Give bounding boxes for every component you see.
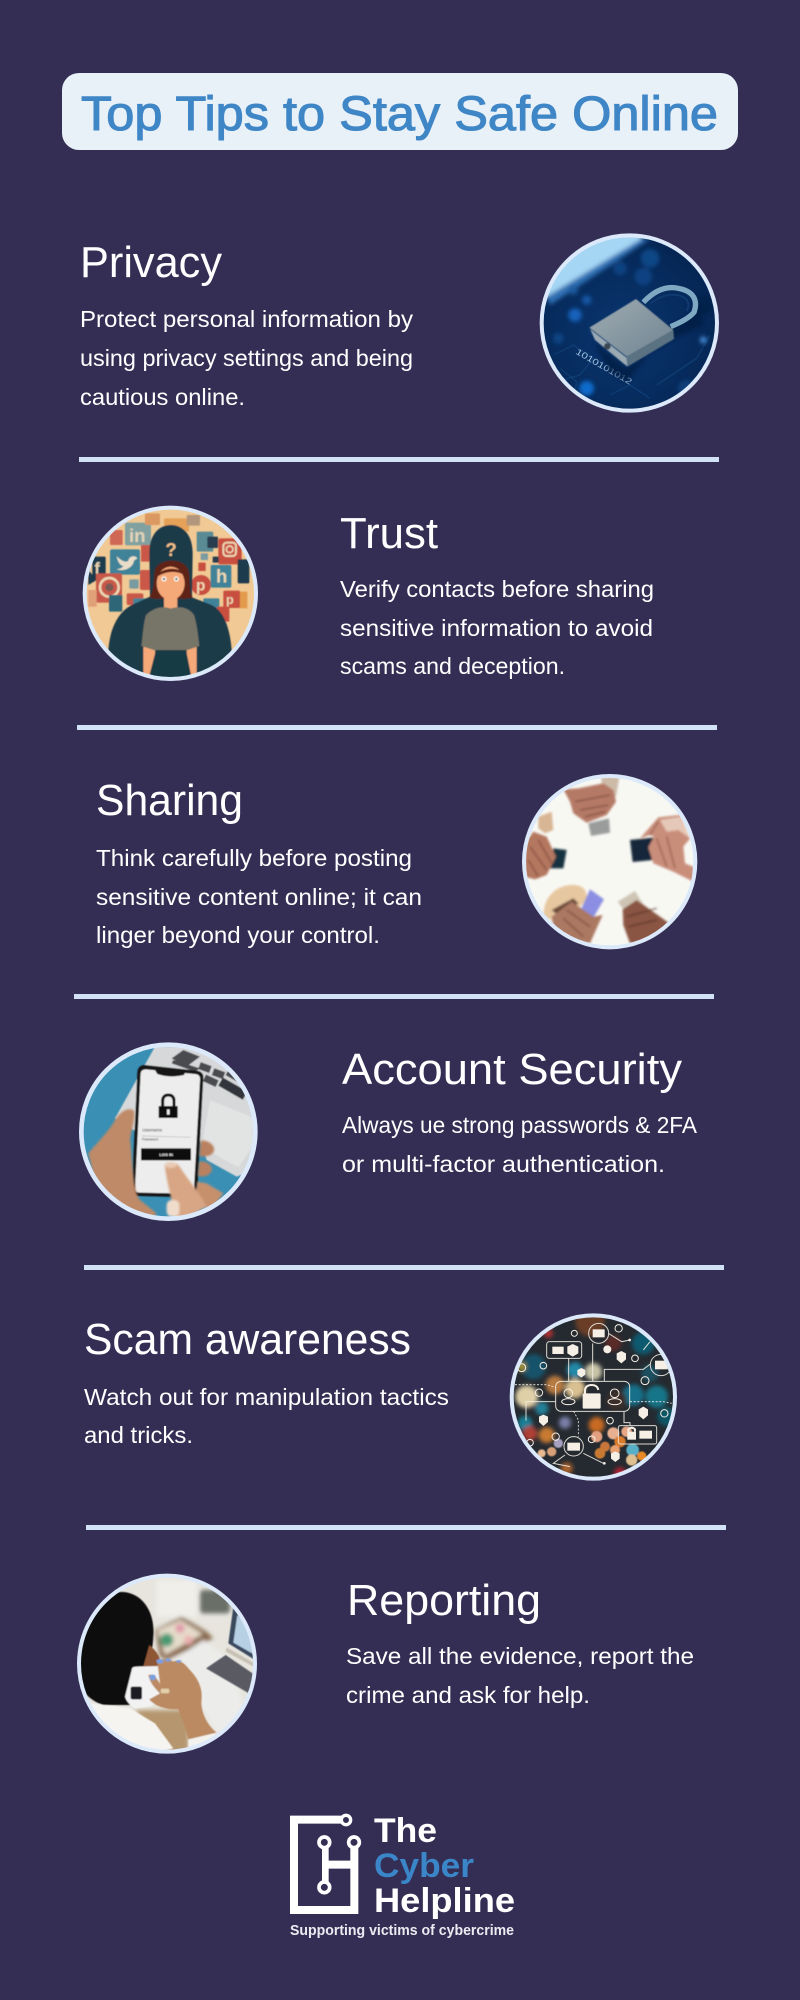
- text: trust description: scams and deception.: [340, 653, 565, 679]
- panel: privacy: [81, 233, 719, 413]
- heading: sharing: Sharing: [96, 776, 243, 825]
- divider: [86, 1525, 726, 1530]
- image: cyber threat network over bokeh lights: [510, 1313, 677, 1481]
- image: woman surrounded by social media icons: in: [129, 525, 146, 546]
- text: reporting description: Save all the evidence, report the: [346, 1643, 694, 1669]
- image: phone login screen with padlock: Password: [142, 1138, 158, 1142]
- text: tagline: Supporting victims of cybercrime: [290, 1922, 514, 1939]
- divider: [84, 1265, 724, 1270]
- text: sharing description: [96, 845, 422, 948]
- heading: scam awareness: Scam awareness: [84, 1315, 411, 1364]
- text: sharing description: sensitive content online; it can: [96, 884, 422, 910]
- panel: sharing: [96, 774, 698, 950]
- text: trust description: Verify contacts before sharing: [340, 576, 654, 602]
- image: woman surrounded by social media icons: ?: [165, 539, 177, 560]
- image: phone login screen with padlock: LOG IN: [159, 1152, 173, 1157]
- text: privacy description: [80, 306, 414, 410]
- text: scam awareness description: and tricks.: [84, 1422, 193, 1448]
- text: privacy description: using privacy settings and being: [80, 345, 413, 371]
- heading: trust: Trust: [340, 509, 438, 558]
- image: phone login screen with padlock: [79, 1042, 258, 1221]
- text: reporting description: [346, 1643, 694, 1708]
- text: scam awareness description: [84, 1384, 449, 1448]
- heading: reporting: Reporting: [347, 1576, 541, 1625]
- text: account security description: Always ue strong passwords & 2FA: [342, 1112, 698, 1138]
- icon: circuit H mark: [294, 1815, 359, 1910]
- panel: reporting: [77, 1574, 693, 1754]
- divider: [79, 457, 719, 462]
- image: padlock on circuit board: [540, 233, 719, 413]
- panel: scam awareness: [84, 1313, 677, 1481]
- text: wordmark: [374, 1812, 515, 1920]
- image: phone login screen with padlock: Username: [142, 1128, 163, 1133]
- image: woman surrounded by social media icons: f: [94, 559, 100, 578]
- image: woman surrounded by social media icons: [82, 506, 258, 681]
- divider: [74, 994, 714, 999]
- heading: account security: Account Security: [342, 1045, 682, 1094]
- text: sharing description: linger beyond your control.: [96, 922, 380, 948]
- image: woman surrounded by social media icons: h: [216, 566, 227, 587]
- image: woman surrounded by social media icons: p: [196, 578, 205, 595]
- panel: account security: [79, 1042, 697, 1221]
- logo: The Cyber Helpline: [290, 1812, 515, 1939]
- text: account security description: or multi-factor authentication.: [342, 1151, 665, 1177]
- image: woman surrounded by social media icons: p: [226, 593, 234, 607]
- title banner: Top Tips to Stay Safe Online: [81, 88, 718, 141]
- text: wordmark: The: [374, 1812, 437, 1850]
- divider: [77, 725, 717, 730]
- text: account security description: [342, 1112, 698, 1177]
- text: privacy description: cautious online.: [80, 384, 245, 410]
- text: trust description: sensitive information to avoid: [340, 615, 653, 641]
- heading: privacy: Privacy: [80, 238, 222, 287]
- text: sharing description: Think carefully before posting: [96, 845, 412, 871]
- text: wordmark: Cyber: [374, 1847, 474, 1885]
- text: reporting description: crime and ask for help.: [346, 1682, 590, 1708]
- text: wordmark: Helpline: [374, 1882, 515, 1920]
- image: woman on the phone at a laptop: [77, 1574, 257, 1754]
- text: privacy description: Protect personal information by: [80, 306, 414, 332]
- panel: trust: [82, 506, 652, 681]
- text: trust description: [340, 576, 654, 679]
- text: scam awareness description: Watch out for manipulation tactics: [84, 1384, 449, 1410]
- image: hands holding smartphones: [522, 774, 698, 950]
- title banner: [62, 73, 738, 150]
- image: padlock on circuit board: 1010101012: [574, 346, 634, 387]
